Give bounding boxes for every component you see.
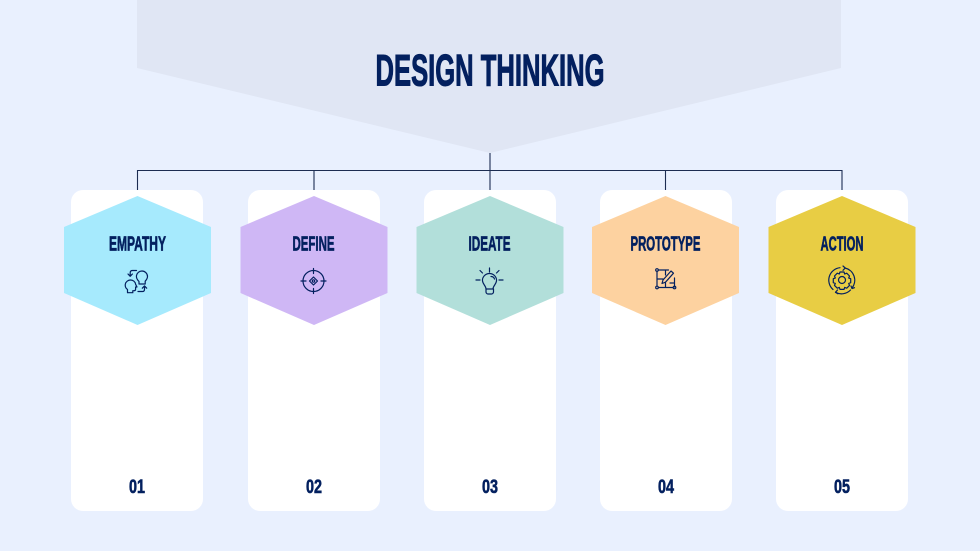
hexagon 05	[768, 196, 916, 325]
card 01	[71, 190, 203, 511]
hexagon 04	[592, 196, 739, 325]
connector lines	[138, 153, 842, 196]
number 01: 01	[129, 477, 145, 498]
panel: define	[240, 190, 388, 511]
panel: ideate	[416, 190, 564, 511]
hexagon 02	[240, 196, 388, 325]
hexagon 01	[64, 196, 211, 325]
panel: prototype	[592, 190, 739, 511]
heading: prototype: PROTOTYPE	[630, 234, 700, 256]
card 05	[776, 190, 908, 511]
number 05: 05	[834, 477, 850, 498]
icon: blueprint and pencil	[656, 269, 676, 289]
panel: empathy	[64, 190, 211, 511]
heading: empathy: EMPATHY	[109, 234, 166, 256]
heading: ideate: IDEATE	[468, 234, 510, 256]
card 04	[600, 190, 732, 511]
panel: action	[768, 190, 916, 511]
header banner	[137, 0, 841, 153]
icon: gear with cycle arrows	[829, 266, 855, 294]
icon: light bulb	[476, 268, 503, 294]
card 02	[248, 190, 380, 511]
card 03	[424, 190, 556, 511]
number 04: 04	[658, 477, 674, 498]
heading: define: DEFINE	[292, 234, 334, 256]
heading: action: ACTION	[820, 234, 864, 256]
hexagon 03	[416, 196, 564, 325]
number 03: 03	[482, 477, 498, 498]
icon: two heads with arrows	[125, 270, 148, 293]
number 02: 02	[306, 477, 322, 498]
icon: target	[301, 268, 326, 294]
title: DESIGN THINKING	[376, 46, 604, 96]
